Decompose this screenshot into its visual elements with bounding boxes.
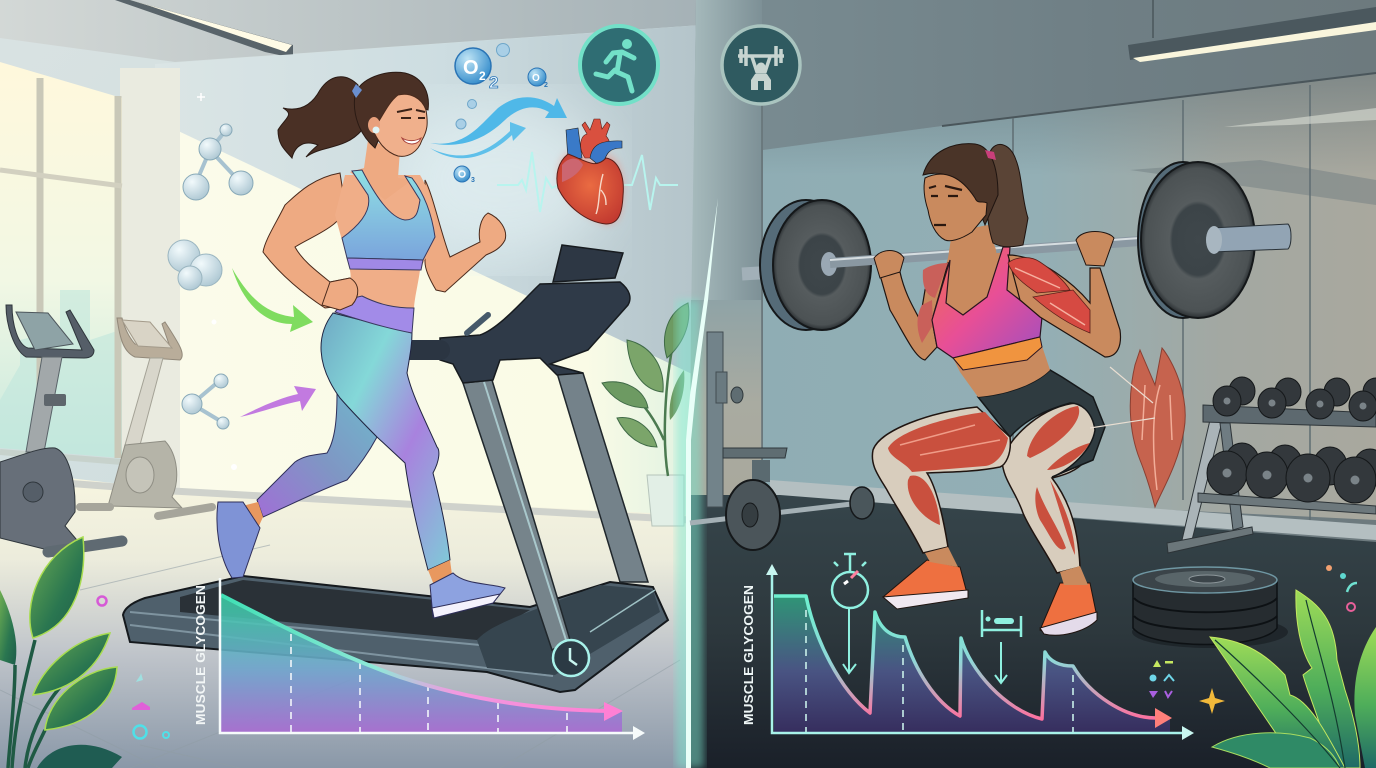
ceiling lamp [1128, 7, 1376, 60]
icon: weightlifting badge [722, 26, 800, 104]
dumbbell rack [1167, 377, 1376, 553]
facial features [929, 186, 962, 225]
divider light beam [676, 198, 718, 768]
anatomy inset: muscle [1090, 348, 1185, 507]
ECG line [497, 152, 678, 212]
time gridlines [291, 634, 567, 733]
squat rack and bench [707, 332, 787, 507]
oxygen bubbles [454, 44, 548, 184]
neck [350, 140, 412, 200]
arrow: rest drop [995, 642, 1007, 683]
icon: heart [557, 119, 623, 224]
torso [930, 252, 1050, 397]
axes [220, 578, 640, 733]
shorts [978, 370, 1105, 477]
chart: strength glycogen intervals [741, 554, 1194, 740]
floor [690, 495, 1376, 768]
icon: clock [553, 640, 589, 676]
small barbell on floor [690, 480, 874, 550]
ear and earbud [368, 117, 380, 133]
neck [945, 225, 1000, 310]
exercise bike front [0, 305, 122, 553]
exercise bike rear [80, 318, 212, 516]
panel: cardio side background [0, 0, 730, 768]
pale wall strip [120, 68, 180, 488]
mirror [763, 73, 1376, 520]
torso skin [335, 175, 435, 310]
floor [0, 470, 690, 768]
right leg [1002, 403, 1097, 573]
glycogen curve [774, 596, 1156, 719]
hair back [354, 72, 428, 148]
oxygen bubbles: O [463, 57, 479, 79]
ponytail [278, 77, 362, 158]
right arm [1008, 255, 1120, 357]
area under curve [774, 596, 1170, 733]
hair [923, 144, 998, 225]
arrow: workout drop [843, 608, 856, 673]
panel: strength side background [690, 0, 1376, 768]
weight plate stack [1132, 567, 1288, 648]
small decorative dots left [98, 93, 205, 738]
icon: stopwatch [832, 554, 868, 608]
face [924, 174, 987, 241]
front arm [425, 180, 506, 292]
window [0, 62, 122, 462]
arrow: purple into muscle [240, 386, 316, 417]
treadmill deck [123, 576, 668, 692]
hair tie [352, 84, 362, 98]
plant: lower right [1210, 590, 1376, 768]
wall glow [390, 100, 610, 260]
sports top [932, 247, 1042, 358]
front upright [463, 380, 570, 650]
left arm muscle [918, 263, 948, 343]
axis label: MUSCLE GLYCOGEN [741, 585, 756, 725]
oxygen bubbles: 3 [471, 177, 475, 184]
lamp reflection [1224, 108, 1376, 127]
axes [772, 572, 1188, 733]
console screen [553, 245, 623, 282]
plant: lower left [0, 537, 122, 768]
sports top [342, 170, 435, 260]
facial features [397, 109, 425, 118]
back hand [322, 278, 358, 310]
molecules [168, 124, 253, 470]
arrow: green into muscle [232, 268, 313, 332]
hair tie [985, 150, 996, 160]
face [372, 94, 427, 156]
waistband [335, 296, 414, 333]
baseboard [770, 480, 1376, 540]
decline curve [221, 595, 608, 711]
front shoe [430, 573, 505, 617]
ponytail [987, 144, 1028, 247]
handlebar [372, 340, 440, 360]
front leg [321, 313, 450, 570]
front ankle [428, 560, 452, 590]
runner [217, 72, 506, 618]
area under curve [221, 595, 622, 733]
sparkle and dots [1199, 565, 1357, 714]
left leg [872, 407, 1010, 553]
lifter [742, 144, 1291, 635]
treadmill [123, 245, 668, 692]
console [440, 282, 630, 383]
rear ankle [243, 502, 263, 528]
rear upright [557, 373, 648, 582]
right arm muscles [1008, 258, 1070, 293]
oxygen bubbles: O [532, 73, 540, 84]
barbell [742, 162, 1291, 330]
legend glyphs [1149, 660, 1174, 698]
shoes [883, 560, 968, 608]
oxygen bubbles: 2 [489, 73, 498, 92]
oxygen bubbles: 2 [479, 69, 486, 83]
rear wall [155, 23, 730, 505]
ceiling lamp [115, 0, 293, 58]
plant behind treadmill [602, 303, 689, 526]
ankles [925, 547, 958, 567]
time gridlines [806, 610, 1073, 733]
rear leg [257, 393, 377, 517]
back arm [263, 173, 356, 308]
arrows: oxygen flow to heart [430, 97, 567, 158]
hands [874, 250, 904, 278]
icon: bed rest [982, 610, 1021, 637]
left arm [880, 263, 948, 360]
column [691, 0, 762, 320]
rear shoe [217, 502, 260, 578]
oxygen bubbles: 2 [544, 82, 548, 89]
chart: cardio glycogen decline [193, 578, 645, 740]
sun beam on wall [155, 120, 730, 515]
ceiling [0, 0, 730, 62]
icon: running badge [580, 26, 658, 104]
axis label: MUSCLE GLYCOGEN [193, 585, 208, 725]
